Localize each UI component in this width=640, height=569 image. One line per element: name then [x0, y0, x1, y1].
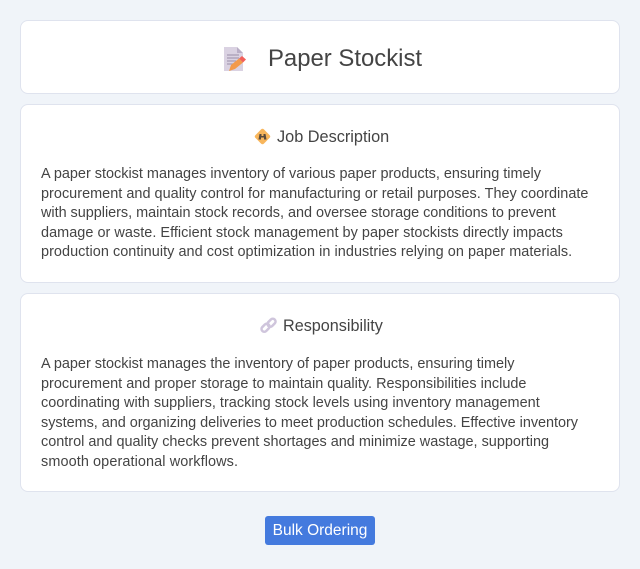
heading: responsibility: Responsibility: [283, 317, 383, 335]
panel: title card: [20, 20, 620, 94]
text block: responsibility: coordinating with suppliers, tracking stock levels using inventory management: [41, 395, 540, 411]
icon: diamond sign: [254, 128, 270, 144]
text block: responsibility: smooth operational workflows.: [41, 454, 238, 470]
text block: responsibility: A paper stockist manages the inventory of paper products, ensuring timely: [41, 356, 514, 372]
text block: job description: procurement and quality control for manufacturing or retail purposes. They coordinate: [41, 186, 588, 202]
text block: job description: [41, 166, 588, 260]
panel: responsibility: [20, 293, 620, 492]
text block: responsibility: systems, and organizing deliveries to meet production schedules. Effective inventory: [41, 415, 578, 431]
text block: responsibility: procurement and proper storage to maintain quality. Responsibilities include: [41, 376, 526, 392]
button: bulk ordering: Bulk Ordering: [273, 522, 367, 539]
heading: job description: Job Description: [277, 128, 389, 146]
text block: job description: with suppliers, maintain stock records, and oversee storage conditions to prevent: [41, 205, 556, 221]
button: bulk ordering: [265, 516, 375, 545]
text block: job description: A paper stockist manages inventory of various paper products, ensuring timely: [41, 166, 541, 182]
icon: link: [260, 318, 277, 333]
text block: job description: damage or waste. Efficient stock management by paper stockists directly impacts: [41, 225, 563, 241]
text block: responsibility: control and quality checks prevent shortages and minimize wastage, supporting: [41, 434, 549, 450]
title: Paper Stockist: [268, 45, 422, 72]
text block: job description: production continuity and cost optimization in industries relying on paper materials.: [41, 244, 572, 260]
panel: job description: [20, 104, 620, 283]
icon: paper and pencil: [224, 47, 246, 71]
text block: responsibility: [41, 356, 578, 470]
